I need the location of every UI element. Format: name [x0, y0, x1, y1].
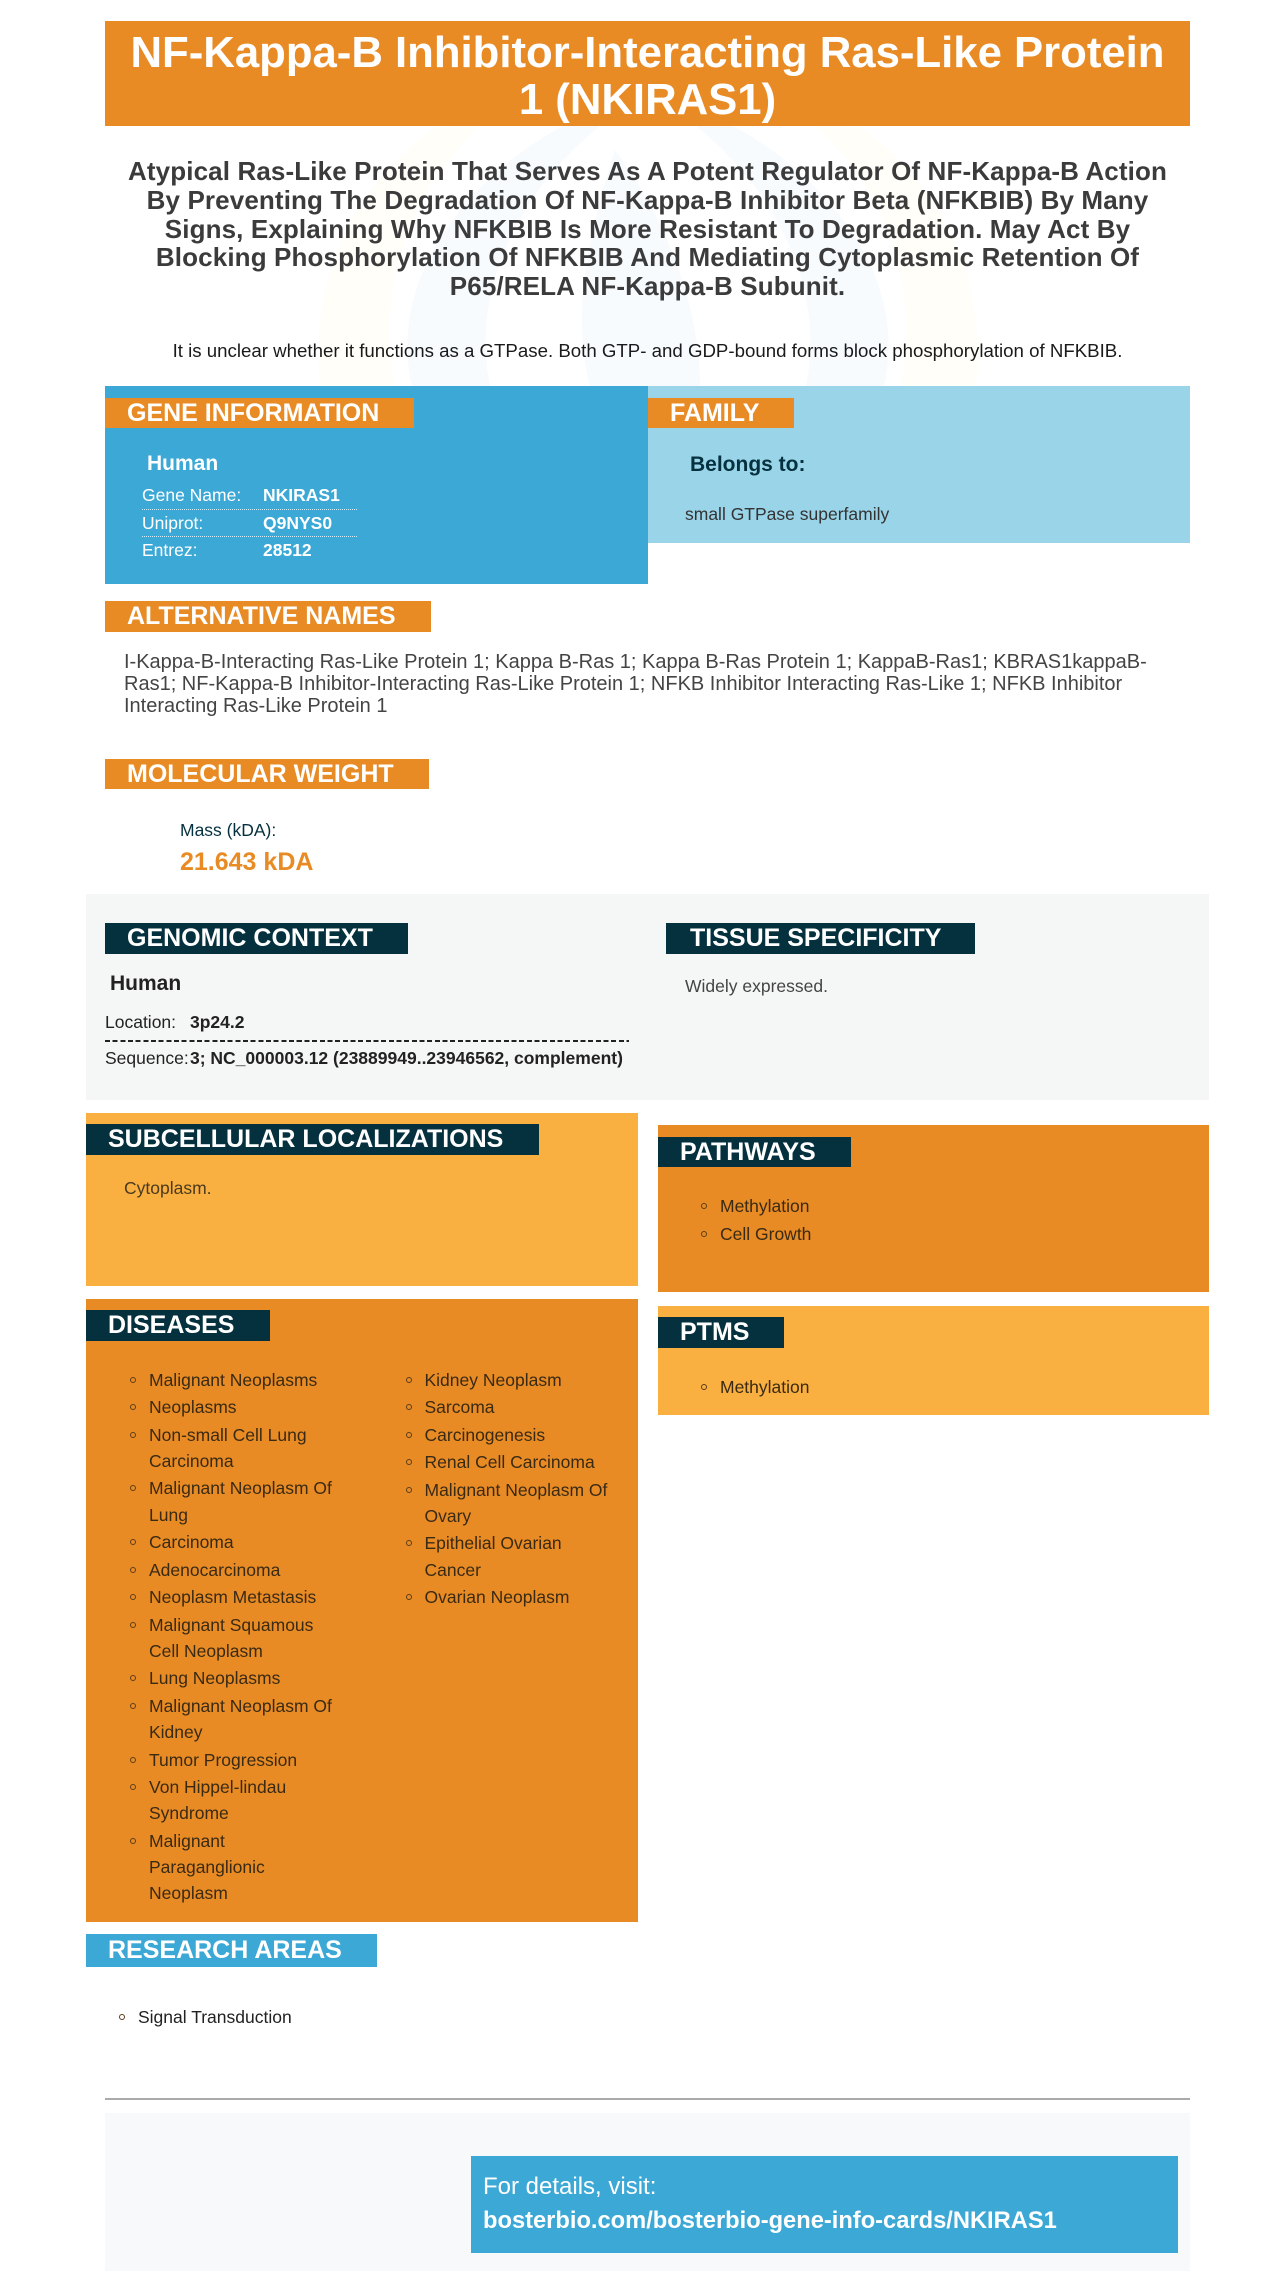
heading: pathways [658, 1137, 851, 1167]
subtitle: By Preventing The Degradation Of NF-Kappa-B Inhibitor Beta (NFKBIB) By Many [147, 185, 1148, 215]
heading: ptms: PTMS [680, 1318, 749, 1346]
panel: genomic context and tissue: 3; NC_000003.12 (23889949..23946562, complement) [190, 1048, 623, 1068]
heading: genomic context: GENOMIC CONTEXT [127, 924, 373, 952]
family value: small GTPase superfamily [685, 504, 889, 524]
location [105, 1012, 244, 1032]
alternative names text: Interacting Ras-Like Protein 1 [124, 695, 387, 717]
panel: genomic context and tissue [86, 894, 1209, 1100]
panel: pathways [658, 1125, 1209, 1292]
heading: research areas [86, 1934, 377, 1967]
heading: subcellular: SUBCELLULAR LOCALIZATIONS [108, 1125, 503, 1153]
disease list column 1: Neoplasm Metastasis [149, 1587, 316, 1607]
disease list column 1: Cell Neoplasm [149, 1641, 263, 1661]
disease list column 1: Neoplasms [149, 1397, 237, 1417]
uniprot row: Q9NYS0 [263, 513, 332, 533]
tissue text: Widely expressed. [685, 976, 828, 996]
disease list column 2: Kidney Neoplasm [424, 1370, 562, 1390]
heading: ptms [658, 1317, 784, 1348]
dashed divider [105, 1040, 629, 1042]
watermark logo [0, 0, 1288, 390]
belongs to: Belongs to: [690, 453, 806, 476]
callout: details link [471, 2156, 1178, 2253]
panel: genomic context and tissue: 3p24.2 [190, 1012, 244, 1032]
uniprot row: Uniprot: [142, 513, 203, 533]
disease list column 1: Carcinoma [149, 1451, 234, 1471]
gene name row [142, 485, 357, 510]
disease list column 1: Malignant Squamous [149, 1615, 313, 1635]
item: Methylation [720, 1196, 810, 1216]
entrez row: Entrez: [142, 540, 197, 560]
heading: alternative names: ALTERNATIVE NAMES [127, 602, 396, 630]
disease list column 2: Ovarian Neoplasm [424, 1587, 569, 1607]
disease list column 1: Malignant Neoplasm Of [149, 1478, 332, 1498]
alternative names text: Ras1; NF-Kappa-B Inhibitor-Interacting Ras-Like Protein 1; NFKB Inhibitor Interacting Ras-Like 1; NFKB Inhibitor [124, 673, 1122, 695]
sequence: Sequence: [105, 1048, 189, 1068]
disease list column 1: Tumor Progression [149, 1750, 297, 1770]
disease list column 2: Renal Cell Carcinoma [424, 1452, 595, 1472]
heading: molecular weight: MOLECULAR WEIGHT [127, 760, 394, 788]
callout url: bosterbio.com/bosterbio-gene-info-cards/NKIRAS1 [483, 2208, 1057, 2234]
disease list column 1: Paraganglionic [149, 1857, 265, 1877]
panel: ptms [658, 1306, 1209, 1415]
heading: research areas: RESEARCH AREAS [108, 1936, 342, 1964]
subtitle [128, 156, 1167, 301]
uniprot row [142, 513, 357, 537]
disease list column 1 [130, 1370, 332, 1903]
heading: family: FAMILY [670, 399, 759, 427]
heading: pathways: PATHWAYS [680, 1138, 816, 1166]
title: NF-Kappa-B Inhibitor-Interacting Ras-Like Protein [130, 28, 1164, 76]
heading: tissue specificity: TISSUE SPECIFICITY [690, 924, 941, 952]
mass label: Mass (kDA): [180, 820, 276, 840]
alternative names text [124, 651, 1147, 717]
callout label: For details, visit: [483, 2173, 656, 2200]
heading: diseases [86, 1310, 270, 1341]
description: It is unclear whether it functions as a GTPase. Both GTP- and GDP-bound forms block phosphorylation of NFKBIB. [173, 340, 1122, 361]
disease list column 1: Lung Neoplasms [149, 1668, 280, 1688]
disease list column 2: Sarcoma [424, 1397, 495, 1417]
species: Human [147, 452, 218, 475]
disease list column 1: Malignant Neoplasm Of [149, 1696, 332, 1716]
disease list column 2: Ovary [424, 1506, 471, 1526]
disease list column 2 [406, 1370, 608, 1607]
disease list column 2: Cancer [424, 1560, 481, 1580]
heading: family [648, 398, 794, 428]
title [105, 21, 1190, 126]
disease list column 1: Non-small Cell Lung [149, 1425, 307, 1445]
mass value: 21.643 kDA [180, 848, 313, 876]
alternative names text: I-Kappa-B-Interacting Ras-Like Protein 1; Kappa B-Ras 1; Kappa B-Ras Protein 1; KappaB-Ras1; KBRAS1kappaB- [124, 651, 1147, 673]
gene name row: Gene Name: [142, 485, 241, 505]
panel: family [648, 386, 1190, 543]
disease list column 1: Neoplasm [149, 1883, 228, 1903]
entrez row: 28512 [263, 540, 312, 560]
heading: gene information: GENE INFORMATION [127, 399, 379, 427]
species: Human [110, 972, 181, 995]
research item: Signal Transduction [138, 2007, 292, 2027]
disease list column 1: Carcinoma [149, 1532, 234, 1552]
subtitle: Signs, Explaining Why NFKBIB Is More Resistant To Degradation. May Act By [165, 214, 1130, 244]
disease list column 1: Malignant [149, 1831, 225, 1851]
disease list column 2: Carcinogenesis [424, 1425, 545, 1445]
panel: diseases [86, 1299, 638, 1922]
item: Methylation [720, 1377, 810, 1397]
disease list column 1: Von Hippel-lindau [149, 1777, 286, 1797]
disease list column 2: Malignant Neoplasm Of [424, 1480, 607, 1500]
disease list column 1: Kidney [149, 1722, 203, 1742]
subtitle: Atypical Ras-Like Protein That Serves As A Potent Regulator Of NF-Kappa-B Action [128, 156, 1167, 186]
disease list column 2: Epithelial Ovarian [424, 1533, 562, 1553]
disease list column 1: Syndrome [149, 1803, 229, 1823]
sequence [105, 1048, 623, 1068]
gene name row: NKIRAS1 [263, 485, 340, 505]
subtitle: Blocking Phosphorylation Of NFKBIB And Mediating Cytoplasmic Retention Of [156, 242, 1139, 272]
panel: subcellular localizations [86, 1113, 638, 1286]
disease list column 1: Lung [149, 1505, 188, 1525]
panel: footer [105, 2113, 1190, 2271]
panel: gene information [105, 386, 648, 584]
entrez row [142, 540, 312, 560]
subtitle: P65/RELA NF-Kappa-B Subunit. [450, 271, 845, 301]
title: 1 (NKIRAS1) [519, 74, 776, 124]
location: Location: [105, 1012, 176, 1032]
item: Cell Growth [720, 1224, 811, 1244]
disease list column 1: Malignant Neoplasms [149, 1370, 317, 1390]
heading: diseases: DISEASES [108, 1311, 234, 1339]
cytoplasm text: Cytoplasm. [124, 1178, 212, 1198]
divider [105, 2098, 1190, 2100]
disease list column 1: Adenocarcinoma [149, 1560, 280, 1580]
